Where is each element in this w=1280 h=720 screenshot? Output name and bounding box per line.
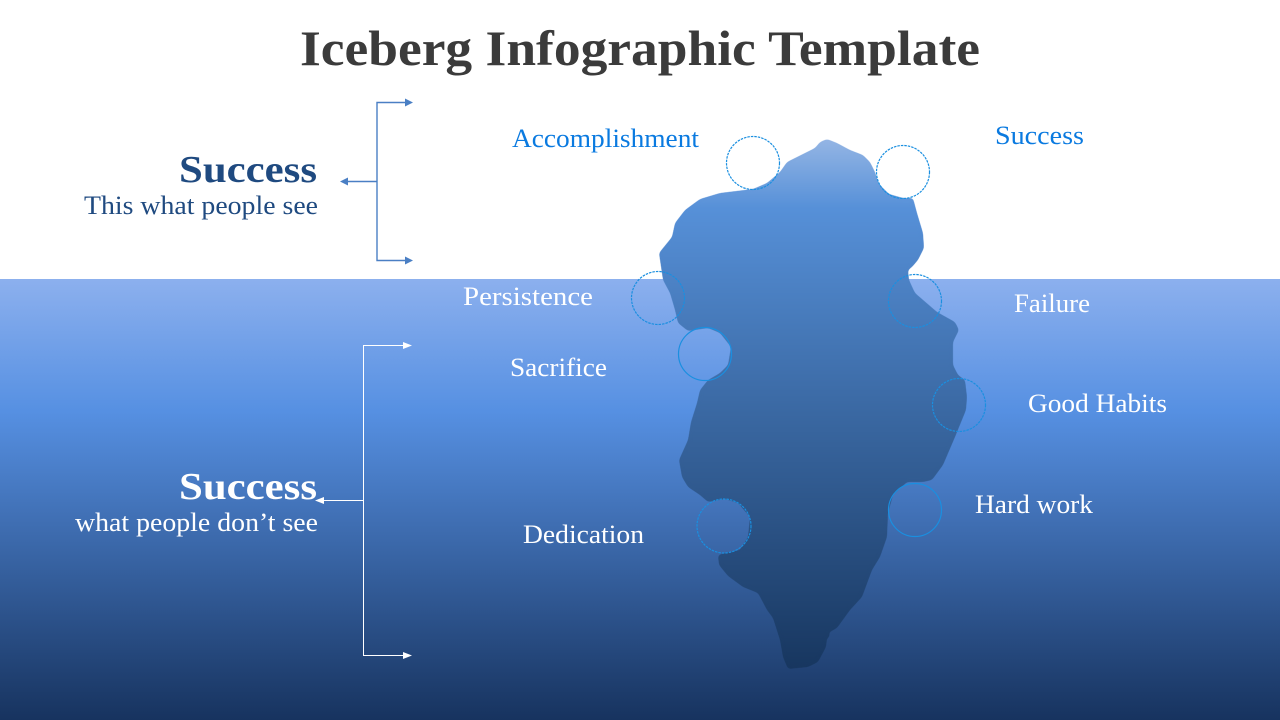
circle: failure [888, 274, 942, 328]
circle: persistence [632, 272, 684, 324]
text block: below water: Success [179, 466, 317, 508]
labels: iceberg [463, 121, 1167, 549]
text block: above water: This what people see [84, 191, 318, 220]
label: sacrifice: Sacrifice [510, 353, 607, 382]
circle: success [876, 146, 930, 198]
text block: below water [75, 466, 318, 537]
arrow bracket: below water [315, 342, 412, 659]
label: persistence: Persistence [463, 282, 593, 311]
label: good habits: Good Habits [1028, 389, 1167, 418]
arrow bracket: above water [340, 98, 413, 264]
circle: dedication [697, 499, 751, 553]
text block: above water [84, 149, 318, 220]
label: dedication: Dedication [523, 520, 644, 549]
circle: good habits [932, 378, 986, 432]
label: hard work: Hard work [975, 490, 1093, 519]
label: accomplishment: Accomplishment [512, 124, 700, 153]
text block: below water: what people don’t see [75, 508, 318, 537]
label: failure: Failure [1014, 289, 1090, 318]
iceberg [659, 139, 967, 669]
title: Iceberg Infographic Template [300, 20, 980, 76]
circles: iceberg markers [632, 136, 986, 553]
circle: accomplishment [726, 136, 780, 190]
circle: hard work [888, 484, 942, 536]
text block: above water: Success [179, 149, 317, 191]
label: success: Success [995, 121, 1084, 150]
circle: sacrifice [678, 328, 732, 380]
panel: water [0, 279, 1280, 720]
